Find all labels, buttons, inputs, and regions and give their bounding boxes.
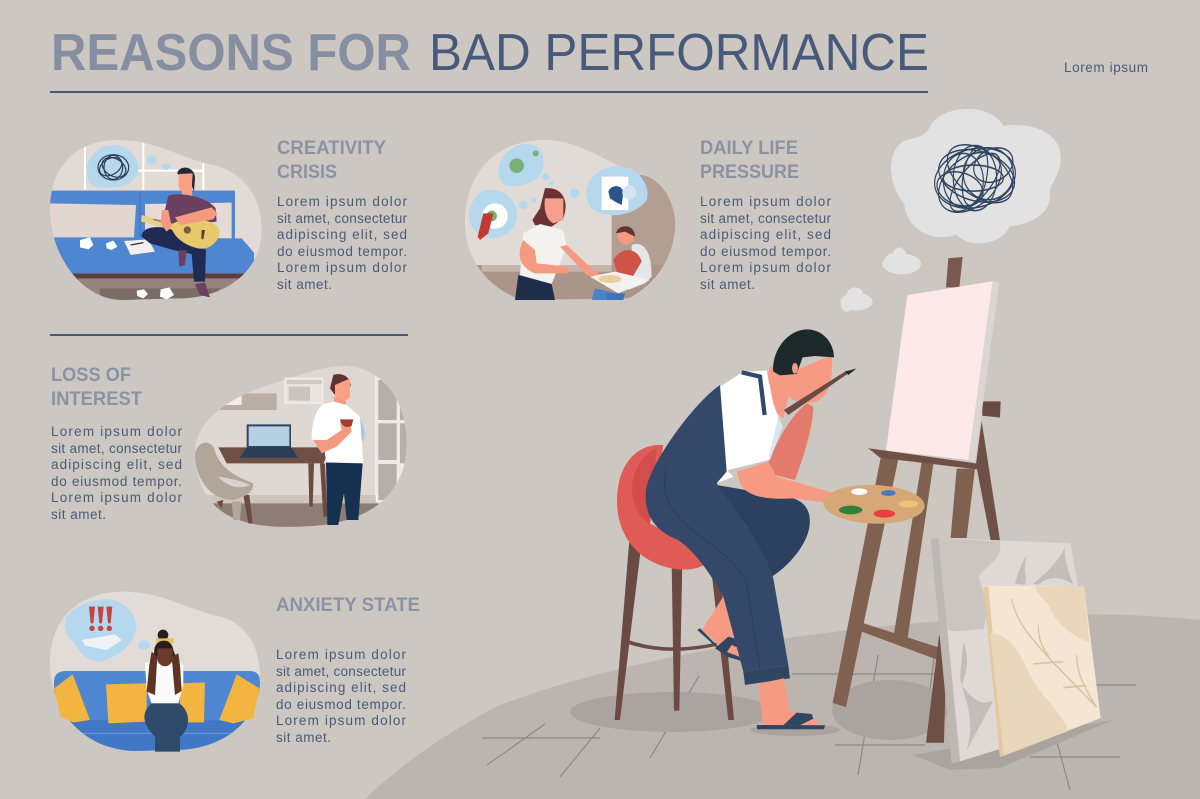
- heading: INTEREST: [51, 389, 142, 410]
- title: REASONS FOR: [51, 24, 411, 82]
- body text: sit amet.: [277, 277, 332, 292]
- overalls: [646, 385, 788, 672]
- artist on stool with palette: [615, 329, 925, 729]
- panel: creativity crisis: [50, 138, 408, 303]
- illustration: woman on sofa with worry thought: [50, 592, 260, 758]
- body text: sit amet, consectetur: [277, 211, 408, 226]
- body text: Lorem ipsum dolor: [700, 260, 832, 275]
- title: [51, 24, 929, 82]
- rear arm and head: [760, 329, 834, 480]
- title: BAD PERFORMANCE: [429, 24, 929, 82]
- body text: sit amet.: [51, 507, 106, 522]
- studio floor: [365, 614, 1200, 799]
- corner label: Lorem ipsum: [1064, 60, 1148, 75]
- heading: ANXIETY STATE: [276, 595, 420, 616]
- body text: Lorem ipsum dolor: [276, 647, 406, 662]
- heading: DAILY LIFE: [700, 138, 798, 159]
- heading: CRISIS: [277, 162, 337, 183]
- body text: Lorem ipsum dolor: [277, 194, 408, 209]
- panel: anxiety state: [50, 592, 420, 758]
- stool legs: [615, 540, 734, 720]
- body text: do eiusmod tempor.: [276, 697, 406, 712]
- heading: [51, 365, 142, 410]
- body text: sit amet, consectetur: [51, 441, 182, 456]
- forward arm: [737, 462, 835, 503]
- floor shadows: [570, 680, 1113, 770]
- heading: CREATIVITY: [277, 138, 386, 159]
- floor tile lines: [482, 650, 1136, 790]
- heading: [700, 138, 799, 183]
- body text: sit amet.: [700, 277, 755, 292]
- heading: PRESSURE: [700, 162, 799, 183]
- body text: Lorem ipsum dolor: [51, 490, 182, 505]
- body text: Lorem ipsum dolor: [276, 713, 406, 728]
- thought clouds and scribble: [841, 109, 1061, 312]
- heading: [277, 138, 386, 183]
- body text: adipiscing elit, sed: [276, 680, 406, 695]
- body text: do eiusmod tempor.: [700, 244, 831, 259]
- body text: [276, 647, 406, 745]
- white shirt: [717, 371, 778, 483]
- far thigh: [717, 485, 810, 577]
- body text: sit amet, consectetur: [276, 664, 406, 679]
- body text: sit amet.: [276, 730, 331, 745]
- body text: [277, 194, 408, 292]
- body text: adipiscing elit, sed: [277, 227, 407, 242]
- body text: Lorem ipsum dolor: [700, 194, 832, 209]
- palette: [823, 483, 925, 525]
- body text: do eiusmod tempor.: [51, 474, 182, 489]
- back leg and sandal: [697, 597, 746, 662]
- body text: Lorem ipsum dolor: [277, 260, 408, 275]
- body text: [700, 194, 832, 292]
- body text: [51, 424, 182, 522]
- stool seat: [617, 445, 707, 570]
- easel with blank canvas and leaning paintings: [833, 257, 1101, 764]
- illustration: mother feeding child: [465, 140, 682, 303]
- paintbrush: [784, 368, 857, 415]
- body text: Lorem ipsum dolor: [51, 424, 182, 439]
- cuff: [743, 665, 790, 685]
- illustration: man at desk with cup: [190, 366, 410, 533]
- body text: adipiscing elit, sed: [51, 457, 182, 472]
- body text: sit amet, consectetur: [700, 211, 832, 226]
- panel: loss of interest: [51, 365, 410, 533]
- panel: daily life pressure: [465, 138, 832, 303]
- front shin and sandal: [757, 678, 825, 729]
- illustration: man with guitar on sofa: [50, 140, 262, 303]
- heading: LOSS OF: [51, 365, 131, 386]
- body text: do eiusmod tempor.: [277, 244, 407, 259]
- body text: adipiscing elit, sed: [700, 227, 831, 242]
